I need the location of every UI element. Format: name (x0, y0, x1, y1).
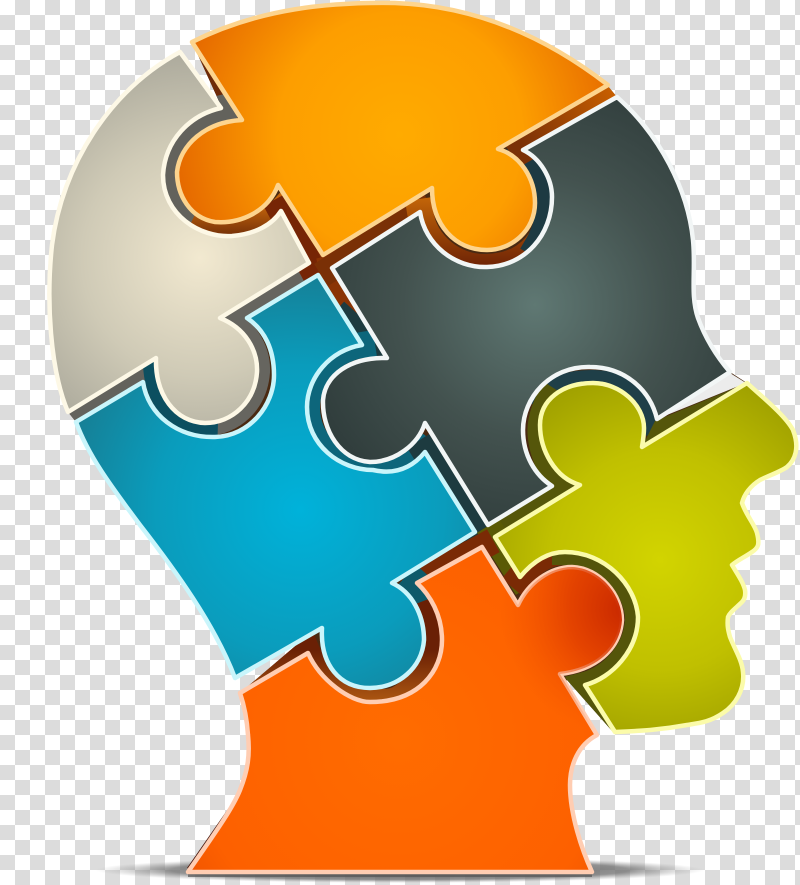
pale wall under the slate piece tip (657, 373, 746, 419)
ground shadow (95, 857, 705, 883)
piece: cream, back of the head (49, 52, 309, 423)
piece: dark slate, forehead (323, 97, 730, 525)
piece: orange, top of the head (177, 3, 608, 255)
piece: red-orange, neck (186, 544, 624, 874)
piece: olive, face profile (495, 383, 796, 732)
dark sliver beside the neck (187, 806, 233, 870)
gap shading between the pieces (69, 56, 745, 730)
piece: blue, lower back of the head (76, 275, 475, 688)
